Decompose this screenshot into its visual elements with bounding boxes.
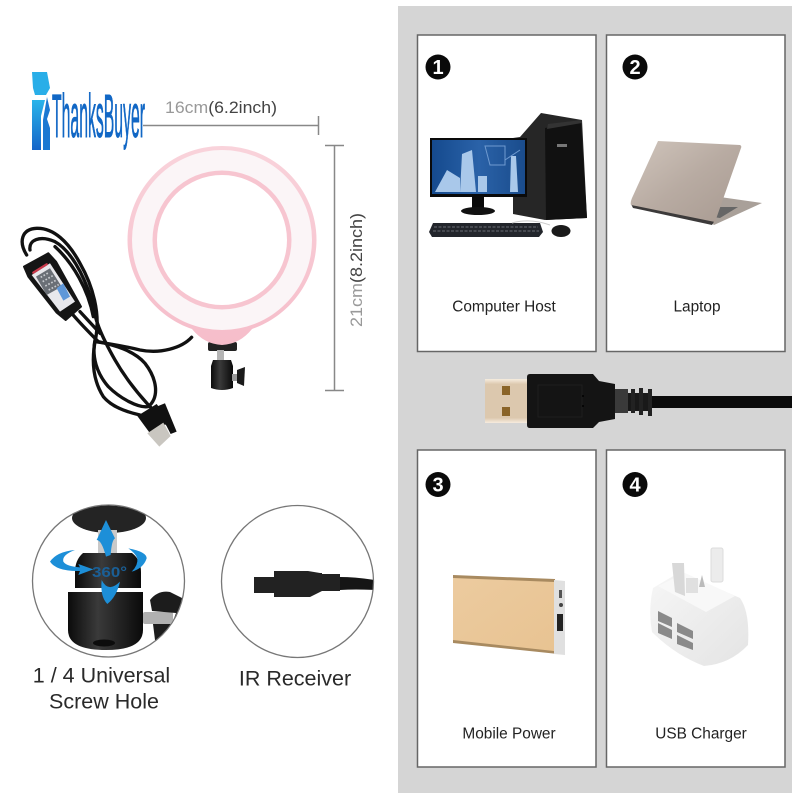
badge 3: 3 [432,474,444,496]
controller [24,253,81,320]
detail circle: screw hole [32,503,186,657]
label: Laptop [673,298,721,316]
caption: screw hole: 1 / 4 Universal [33,664,170,688]
mouse [552,225,570,237]
height dimension line [325,146,344,390]
badge 2: 2 [629,57,641,79]
tower [513,113,587,220]
card 1: computer host [418,35,596,352]
width dimension line [143,116,318,135]
360 degree rotation arrows [50,520,147,604]
width dimension label: 16cm(6.2inch) [165,98,277,117]
label: Computer Host [452,298,556,316]
badge 4: 4 [629,474,641,496]
monitor [430,138,527,215]
caption: IR receiver: IR Receiver [239,666,351,690]
usb plug [137,404,170,433]
card 3: mobile power [418,450,596,767]
badge 1: 1 [432,57,444,79]
card 2: laptop [606,35,785,352]
caption: screw hole: Screw Hole [49,690,159,714]
height dimension label: 21cm(8.2inch) [347,213,366,327]
power bank [453,575,565,655]
usb connector [485,374,792,428]
ball head stand [208,342,245,390]
logo: ThanksBuyer [32,72,145,150]
plug charger [650,548,748,666]
label: Mobile Power [462,726,556,742]
card 4: usb charger [606,450,785,767]
badge 2 [622,54,648,80]
badge 4 [622,472,648,497]
keyboard [429,223,543,237]
badge 1 [426,54,450,80]
detail circle: screw hole: 360° [92,564,127,581]
logo: ThanksBuyer: ThanksBuyer [52,82,145,150]
usb cable with controller [22,228,192,447]
compatibility panel background [398,6,792,793]
laptop icon [631,141,762,225]
badge 3 [426,472,450,497]
ring light [128,146,316,390]
detail circle: IR receiver [222,506,375,658]
label: USB Charger [655,726,747,742]
